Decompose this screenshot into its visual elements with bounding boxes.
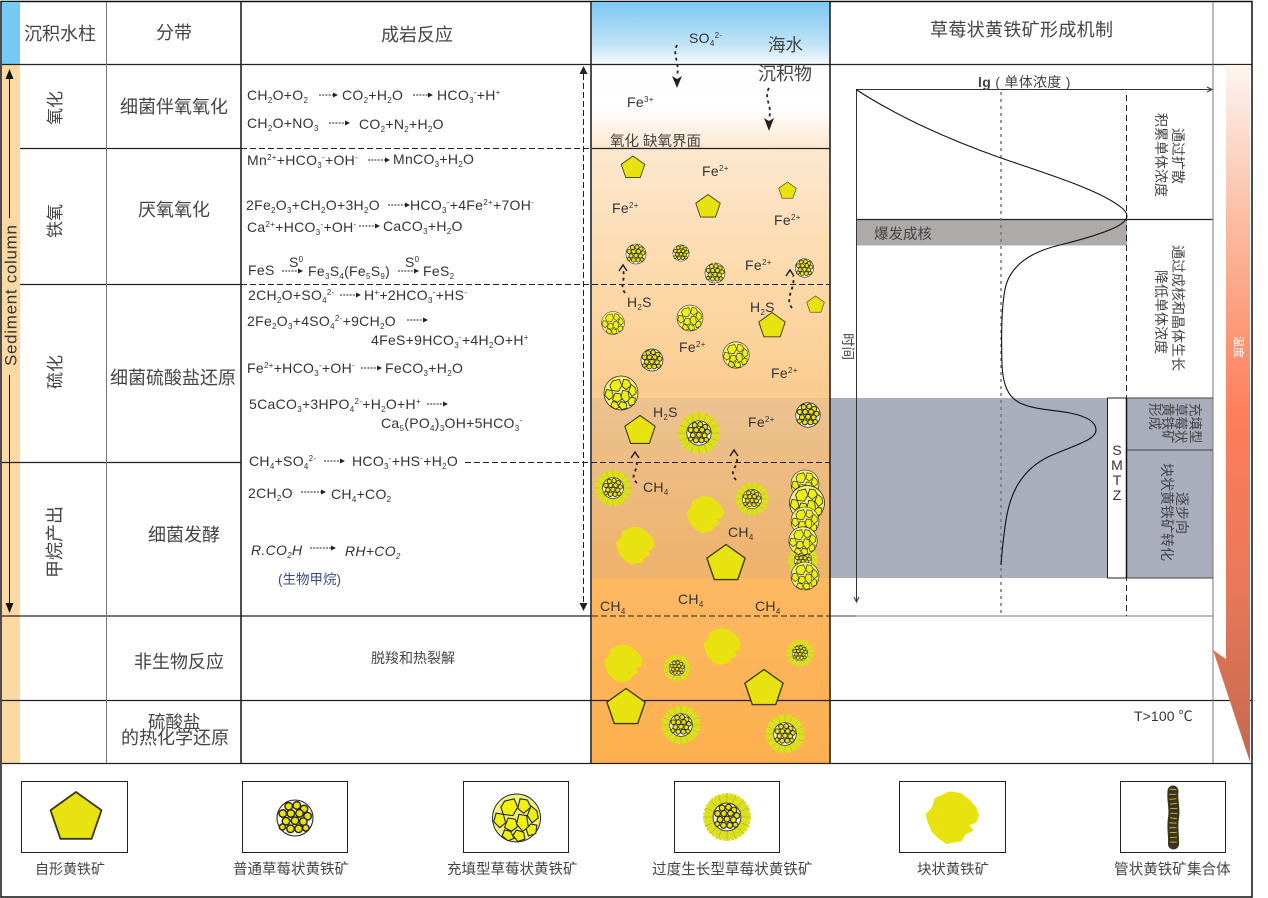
reaction 6: FeS (248, 262, 275, 278)
zone label: sulfidation: 硫化 (46, 355, 65, 389)
redox interface label: 氧化 缺氧界面 (610, 133, 701, 150)
reaction 2: CH2O+NO3 (247, 115, 319, 133)
burst nucleation label: 爆发成核 (874, 226, 932, 243)
stage note: infilled framboid formation (1147, 403, 1202, 444)
legend: overgrown framboid: 过度生长型草莓状黄铁矿 (652, 861, 813, 878)
reaction 13: R.CO2H (251, 542, 303, 560)
reaction 2: CO2+N2+H2O (359, 116, 444, 134)
process: thermochemical sulfate reduction: 硫酸盐 (148, 712, 200, 732)
stage note: infilled framboid formation: 黄铁矿 (1160, 403, 1175, 444)
temperature arrow (1213, 65, 1250, 762)
SMTZ box: S (1112, 442, 1122, 458)
SMTZ right grey cells (1126, 398, 1213, 578)
reaction 12: CH4+CO2 (331, 486, 392, 504)
legend: normal framboid: 普通草莓状黄铁矿 (233, 861, 349, 878)
ion labels: CH4 (728, 524, 754, 542)
reaction 6: S0 (289, 254, 304, 270)
legend: overgrown framboid (652, 782, 813, 878)
reaction 10 (249, 396, 522, 433)
process: thermochemical sulfate reduction: 的热化学还原 (121, 728, 229, 748)
legend: infilled framboid (447, 782, 578, 878)
stage note: diffusion accumulation (1153, 113, 1186, 197)
legend: normal framboid (233, 782, 349, 878)
euhedral pyrite crystals (607, 156, 824, 724)
SMTZ box: M (1111, 457, 1123, 473)
reactions column (246, 87, 534, 666)
stage note: transformation to massive pyrite (1159, 463, 1190, 561)
reaction 2 (247, 115, 444, 134)
process: bacterial sulfate reduction: 细菌硫酸盐还原 (110, 368, 236, 388)
reaction 9: FeCO3+H2O (385, 360, 463, 378)
ferric iron label: Fe3+ (627, 94, 654, 110)
water column colour cell (2, 2, 20, 64)
panel: environment labels (600, 30, 812, 616)
legend: euhedral pyrite: 自形黄铁矿 (35, 861, 105, 877)
legend: euhedral pyrite (22, 782, 128, 877)
reaction 12 (248, 485, 392, 504)
reaction 11: HCO3-+HS-+H2O (352, 453, 458, 471)
ion labels: CH4 (678, 591, 704, 609)
stage note: infilled framboid formation: 形成 (1147, 403, 1162, 430)
reaction 8: 4FeS+9HCO3-+4H2O+H+ (371, 332, 529, 350)
reaction 1 (247, 87, 501, 105)
stage note: transformation to massive pyrite: 逐步向 (1174, 492, 1190, 534)
ion labels: CH4 (643, 479, 669, 497)
reaction 7: 2CH2O+SO42- (248, 287, 335, 305)
overgrown framboids (595, 412, 814, 754)
axis title: lg ( 单体浓度 ) (978, 74, 1071, 90)
stage note: nucleation and growth (1153, 245, 1186, 371)
reaction 3 (247, 151, 474, 170)
zone label: oxidation: 氧化 (46, 91, 65, 125)
reaction 13 (251, 542, 401, 561)
sediment column colour bar (2, 65, 20, 763)
seawater label: 海水 (768, 35, 803, 55)
process: bacterial aerobic oxidation: 细菌伴氧氧化 (120, 97, 228, 117)
sulfate label: SO42- (689, 30, 722, 48)
reaction 8: 2Fe2O3+4SO42-+9CH2O (247, 313, 396, 331)
sediment column axis (2, 69, 20, 613)
stage note: nucleation and growth: 通过成核和晶体生长 (1170, 245, 1186, 371)
reaction 13: RH+CO2 (345, 543, 401, 561)
reaction 9: Fe2++HCO3-+OH- (247, 360, 355, 378)
temperature arrow: 温度 (1232, 336, 1246, 358)
migration arrows (619, 45, 794, 483)
ion labels (600, 163, 801, 616)
panel: environment gradient column (592, 2, 830, 763)
critical concentration dashed lines (1000, 92, 1002, 616)
reaction 6 (248, 254, 455, 281)
reaction 1: CO2+H2O (342, 87, 403, 105)
SMTZ box: T (1113, 472, 1122, 488)
reaction 5 (247, 218, 463, 237)
reaction 6: FeS2 (423, 263, 455, 281)
infilled framboids (602, 305, 749, 410)
zone label: methanogenesis: 甲烷产出 (45, 506, 65, 578)
legend: infilled framboid: 充填型草莓状黄铁矿 (447, 861, 578, 878)
sediment label: 沉积物 (758, 64, 812, 84)
stage note: nucleation and growth: 降低单体浓度 (1153, 270, 1169, 354)
stage note: diffusion accumulation: 通过扩散 (1170, 128, 1186, 184)
process: thermochemical sulfate reduction (121, 712, 229, 748)
reaction 4: HCO3-+4Fe2++7OH- (410, 197, 534, 215)
reaction 11 (249, 453, 458, 471)
SMTZ box: Z (1113, 487, 1122, 503)
tubular framboid aggregate (788, 470, 824, 590)
ion labels: Fe2+ (774, 212, 801, 228)
ion labels: Fe2+ (702, 163, 729, 179)
ion labels: Fe2+ (748, 414, 775, 430)
chart: monomer concentration curve (840, 74, 1212, 616)
reaction 8 (247, 313, 529, 350)
stage note: transformation to massive pyrite: 块状黄铁矿转化 (1159, 463, 1175, 561)
reaction 10: 5CaCO3+3HPO42-+H2O+H+ (249, 396, 421, 414)
process: anaerobic oxidation: 厌氧氧化 (138, 200, 210, 220)
y axis (854, 89, 859, 602)
ion labels: Fe2+ (771, 365, 798, 381)
temperature note: T>100 ℃ (1134, 708, 1193, 724)
reaction 1: CH2O+O2 (247, 87, 308, 105)
reaction 6: S0 (405, 254, 420, 270)
sediment column axis: Sediment column (2, 225, 20, 366)
ion labels: Fe2+ (612, 200, 639, 216)
reaction 11: CH4+SO42- (249, 453, 316, 471)
ion labels: CH4 (600, 598, 626, 616)
legend: tubular aggregate: 管状黄铁矿集合体 (1114, 861, 1231, 878)
ion labels: H2S (653, 404, 678, 422)
process: bacterial fermentation: 细菌发酵 (148, 525, 220, 545)
ion labels: Fe2+ (745, 257, 772, 273)
stage note: diffusion accumulation: 积累单体浓度 (1153, 113, 1169, 197)
ion labels: H2S (627, 294, 652, 312)
stage note: infilled framboid formation: 草莓状 (1173, 403, 1188, 444)
SMTZ grey band (830, 398, 1107, 578)
biogenic methane note: (生物甲烷) (278, 572, 341, 587)
header: diagenetic reactions: 成岩反应 (381, 25, 453, 45)
burst nucleation band (856, 220, 1127, 246)
concentration curve (856, 90, 1127, 565)
decarboxylation note: 脱羧和热裂解 (371, 650, 455, 666)
stage note: infilled framboid formation: 充填型 (1188, 403, 1202, 444)
dashed vertical depth arrow (580, 66, 588, 611)
reaction 6: Fe3S4(Fe5S9) (308, 263, 390, 281)
legend (22, 782, 1231, 878)
reaction 12: 2CH2O (248, 485, 293, 503)
reaction 7: H++2HCO3-+HS- (364, 287, 467, 305)
reaction 9 (247, 360, 463, 378)
zone label: iron: 铁氧 (46, 204, 65, 238)
reaction 4 (246, 197, 534, 215)
reaction 4: 2Fe2O3+CH2O+3H2O (246, 197, 380, 215)
reaction 1: HCO3-+H+ (437, 87, 501, 105)
ion labels: CH4 (755, 598, 781, 616)
process: abiotic reaction: 非生物反应 (134, 652, 224, 672)
SMTZ box (1108, 398, 1213, 578)
saturation dashed line (1126, 95, 1128, 616)
ion labels: Fe2+ (679, 339, 706, 355)
header: zones: 分带 (156, 23, 192, 43)
legend: massive pyrite: 块状黄铁矿 (917, 861, 989, 878)
normal framboids (626, 244, 820, 427)
time axis label: 时间 (840, 333, 855, 360)
reaction 5: CaCO3+H2O (383, 218, 463, 236)
reaction 7 (248, 287, 467, 305)
header: water column: 沉积水柱 (24, 24, 96, 44)
legend: tubular aggregate (1114, 782, 1231, 878)
massive pyrite (604, 496, 741, 682)
reaction 3: MnCO3+H2O (393, 151, 474, 169)
reaction 10: Ca5(PO4)3OH+5HCO3- (381, 415, 522, 433)
reaction 5: Ca2++HCO3-+OH- (247, 219, 357, 237)
reaction 3: Mn2++HCO3-+OH- (247, 152, 358, 170)
ion labels: H2S (750, 299, 775, 317)
header: formation mechanism: 草莓状黄铁矿形成机制 (930, 20, 1113, 40)
x axis (856, 87, 1212, 92)
legend: massive pyrite (900, 782, 1006, 878)
